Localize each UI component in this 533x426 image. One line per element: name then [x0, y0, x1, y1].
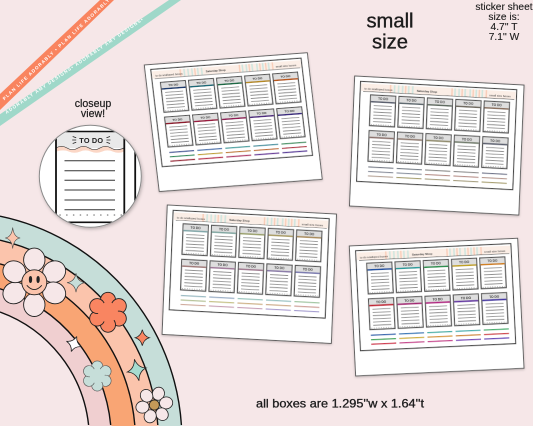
sheet 3 boxes: TO DO [247, 229, 258, 233]
sheet 1 boxes: TO DO [280, 74, 291, 79]
sheet 4 boxes: TO DO [487, 259, 498, 263]
text: sticker sheet size: 7.1'' W [489, 32, 520, 43]
sheet 1: Saturday Shop [206, 68, 226, 74]
sheet 2 boxes [368, 95, 510, 169]
sheet 3 boxes: TO DO [189, 261, 200, 266]
heading: small size: small [366, 11, 414, 33]
sheet 2: Saturday Shop [417, 89, 438, 94]
icon: sparkle teal [67, 273, 85, 292]
sheet 1 boxes: TO DO [196, 81, 207, 85]
sheet 2 boxes: TO DO [462, 137, 473, 142]
ribbon: orange plan life adorably: PLAN LIFE ADORABLY • PLAN LIFE ADORABLY [2, 0, 111, 101]
sheet 2 boxes: TO DO [492, 103, 502, 108]
ribbon: teal adorably amy designs: ADORABLY AMY DESIGNS• ADORABLY AMY DESIGNS• [4, 16, 145, 115]
sheet 3 boxes: TO DO [191, 226, 201, 230]
sheet 1 header text: to do scalloped boxes [155, 72, 183, 78]
text: sticker sheet size: sticker sheet [475, 2, 533, 13]
sheet 1 boxes: TO DO [252, 76, 263, 81]
sheet 2 colour strips [368, 167, 507, 183]
sheet 4: small size boxes [484, 249, 506, 254]
sheet 1 boxes: TO DO [200, 115, 211, 120]
sheet 2: small size boxes [489, 93, 511, 98]
sheet 1 boxes: TO DO [168, 83, 179, 87]
sheet 4 [349, 238, 524, 376]
sheet 4 header text: to do scalloped boxes [360, 254, 389, 260]
sheet 3 boxes: TO DO [304, 232, 315, 237]
sheet 2 boxes: TO DO [378, 97, 389, 102]
sheet 3 boxes: TO DO [217, 263, 228, 267]
icon: orange flower [87, 292, 129, 332]
icon: sparkle peach [5, 228, 20, 248]
sheet 4 boxes: TO DO [431, 262, 442, 266]
sheet 2 boxes: TO DO [433, 136, 444, 140]
sheet 4 boxes: TO DO [376, 300, 387, 304]
sheet 2 boxes: TO DO [463, 102, 474, 106]
sheet 3: Saturday Shop [229, 218, 250, 223]
sheet 2 boxes: TO DO [406, 99, 417, 103]
heading: small size: size [372, 31, 408, 53]
sheet 2 [350, 76, 524, 215]
sheet 2 header text: to do scalloped boxes [364, 87, 393, 92]
sheet 2 boxes: TO DO [490, 139, 501, 143]
sheet 3 boxes: TO DO [274, 266, 285, 271]
sheet 3 boxes: TO DO [246, 264, 257, 269]
sheet 1 boxes: TO DO [228, 113, 239, 118]
sheet 2 boxes: TO DO [435, 100, 446, 105]
icon: smiley flower [0, 248, 70, 316]
closeup label: to do: TO DO [79, 136, 103, 145]
sheet 3 boxes: TO DO [303, 268, 313, 272]
sheet 1: small size boxes [275, 63, 297, 69]
heading: closeup view: view! [81, 108, 105, 120]
sheet 3 boxes: TO DO [219, 227, 230, 232]
sheet 2 boxes: TO DO [376, 133, 387, 137]
heading: closeup view: closeup [75, 98, 111, 110]
text: sticker sheet size: 4.7'' T [491, 22, 517, 33]
sheet 4: Saturday Shop [412, 252, 433, 257]
icon: star white [64, 334, 84, 354]
icon: small daisy [135, 385, 174, 425]
sheet 1 colour strips [169, 142, 307, 161]
text: sticker sheet size: size is: [488, 12, 520, 23]
sheet 1 boxes: TO DO [224, 78, 235, 83]
caption: box dimensions: all boxes are 1.295''w x 1.64''t [256, 397, 425, 410]
sheet 4 boxes: TO DO [404, 299, 415, 303]
sheet 1 [144, 53, 322, 191]
sheet 4 boxes: TO DO [374, 264, 385, 269]
sheet 4 colour strips [371, 329, 509, 344]
sheet 1 boxes and strips [160, 72, 307, 161]
rainbow [0, 216, 182, 426]
closeup circle [39, 125, 141, 227]
sheet 3: small size boxes [302, 222, 324, 227]
ribbon: teal adorably amy designs [0, 0, 181, 126]
sheet 4 boxes: TO DO [459, 260, 470, 265]
sheet 1 boxes [160, 72, 305, 147]
sheet 4 boxes: TO DO [403, 263, 413, 267]
sheet 4 boxes: TO DO [489, 295, 500, 299]
sheet 3 colour strips [180, 295, 320, 312]
sheet 3 [162, 205, 336, 343]
icon: diamond orange [135, 330, 149, 346]
sheet 3 header text: to do scalloped boxes [177, 215, 206, 221]
sheet 2 boxes: TO DO [405, 134, 416, 139]
sheet 4 boxes [367, 257, 508, 330]
sheet 4 boxes: TO DO [433, 297, 443, 302]
sheet 1 boxes: TO DO [284, 109, 295, 114]
sheet 1 boxes: TO DO [172, 117, 183, 122]
sheet 4 boxes: TO DO [461, 296, 472, 300]
sheet 1 boxes: TO DO [256, 111, 267, 116]
icon: teal flower [81, 361, 113, 391]
icon: star teal [125, 357, 148, 383]
sheet 3 boxes [181, 224, 322, 297]
sheet 3 boxes: TO DO [276, 230, 286, 235]
